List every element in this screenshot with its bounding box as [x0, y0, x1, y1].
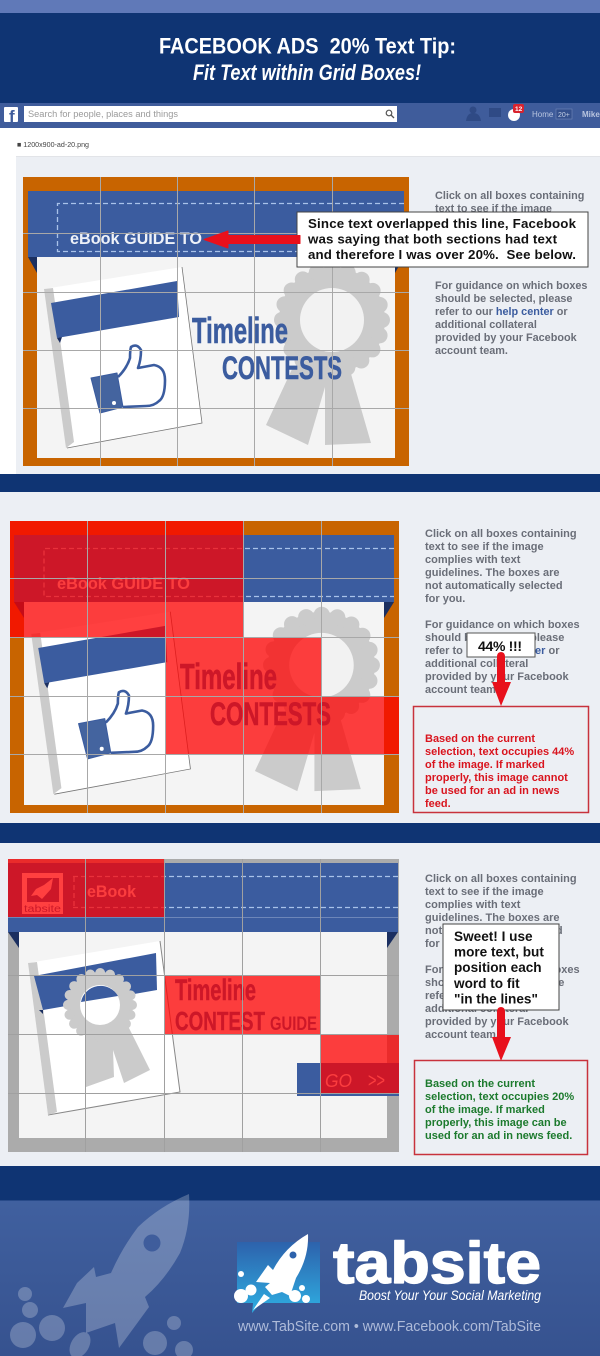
instructions text: account team. [425, 1029, 499, 1041]
tabsite wordmark: tabsite [333, 1231, 541, 1296]
result box: pass: of the image. If marked [425, 1104, 545, 1116]
calendar card with thumb [31, 612, 190, 794]
callout: overlap explanation: and therefore I was over 20%. See below. [308, 247, 576, 262]
result box: fail [414, 706, 588, 812]
result box: fail: Based on the current [425, 733, 535, 745]
ad text: eBook guide: eBook GUIDE TO [70, 229, 202, 248]
facebook top bar: 20+ [558, 112, 570, 119]
instructions text: For guidance on which boxes [425, 619, 580, 631]
callout: sweet: "in the lines" [454, 992, 538, 1006]
ad text: timeline: Timeline [180, 656, 277, 697]
instructions text: account team. [435, 345, 508, 357]
instructions text [425, 873, 580, 1041]
card with ribbon [28, 941, 180, 1115]
facebook top bar: Search for people, places and things [28, 109, 178, 119]
ribbon badge [255, 612, 375, 791]
result box: pass: selection, text occupies 20% [425, 1091, 574, 1103]
callout: 44% [467, 633, 535, 657]
rocket window [144, 1234, 160, 1252]
selected grid cells [10, 521, 399, 754]
GO button: GO [325, 1071, 352, 1091]
result box: fail: feed. [425, 798, 451, 810]
logo square [22, 873, 63, 915]
result box: fail: properly, this image cannot [425, 772, 568, 784]
panel: step 1 [16, 156, 600, 474]
navy divider [0, 823, 600, 843]
callout: sweet: more text, but [454, 944, 544, 960]
callout: 44%: 44% !!! [478, 638, 522, 654]
callout: sweet: position each [454, 960, 542, 975]
ad text: contest guide: CONTEST [175, 1006, 265, 1036]
callout: sweet: word to fit [453, 976, 520, 991]
navy divider [0, 1166, 600, 1201]
instructions text: For guidance on which boxes [435, 280, 587, 292]
result box: fail: be used for an ad in news [425, 785, 559, 797]
instructions text: should be selected, please [425, 977, 564, 989]
result box: pass: Based on the current [425, 1078, 535, 1090]
facebook top bar [0, 103, 600, 128]
instructions text: additional collateral [425, 1003, 528, 1015]
footer [0, 1194, 600, 1356]
instructions text: additional collateral [425, 658, 528, 670]
ad image: marked at 20% [8, 859, 399, 1152]
instructions text: should be selected, please [425, 632, 564, 644]
instructions text: guidelines. The boxes are [425, 567, 560, 579]
instructions text: For guidance on which boxes [425, 964, 580, 976]
instructions text: refer to our help center or [425, 990, 560, 1002]
ribbon badge [266, 267, 385, 445]
result box: fail: selection, text occupies 44% [425, 746, 574, 758]
instructions text: not automatically selected [425, 925, 563, 937]
instructions text [435, 190, 587, 357]
instructions text: refer to our help center or [425, 645, 560, 657]
instructions text: text to see if the image [425, 541, 544, 553]
title banner: FACEBOOK ADS 20% Text Tip: [159, 34, 456, 58]
ad image: marked at 44% [10, 521, 399, 813]
instructions text: provided by your Facebook [435, 332, 578, 344]
instructions text: refer to our help center or [435, 306, 568, 318]
instructions text: should be selected, please [435, 293, 572, 305]
title banner [0, 13, 600, 103]
instructions text: complies with text [425, 554, 521, 566]
background rocket [10, 1194, 193, 1356]
instructions text: provided by your Facebook [425, 1016, 570, 1028]
result box: pass: properly, this image can be [425, 1117, 567, 1129]
result box: pass [414, 1060, 588, 1154]
panel: step 3 [0, 843, 600, 1166]
instructions text: for you. [425, 938, 465, 950]
tabsite logo icon [234, 1234, 320, 1313]
ad text: guide: GUIDE [270, 1014, 317, 1035]
file name: ■ 1200x900-ad-20.png [17, 140, 89, 149]
ad image: first layout [23, 177, 409, 466]
facebook top bar: Mike [582, 110, 600, 119]
instructions text: not automatically selected [425, 580, 563, 592]
ad text: contests: CONTESTS [222, 350, 342, 386]
arrow: to result [492, 652, 511, 706]
instructions text [425, 528, 580, 696]
instructions text: provided by your Facebook [425, 671, 570, 683]
facebook top bar: Home [532, 110, 554, 119]
GO button [297, 1063, 399, 1096]
instructions text: account team. [425, 684, 499, 696]
result box: pass: used for an ad in news feed. [425, 1130, 572, 1142]
callout: sweet: Sweet! I use [454, 929, 533, 944]
logo square: tabsite [24, 904, 62, 915]
instructions text: Click on all boxes containing [425, 873, 577, 885]
instructions text: Click on all boxes containing [425, 528, 577, 540]
callout: overlap explanation: Since text overlapped this line, Facebook [308, 216, 577, 231]
arrow: to text [204, 231, 300, 248]
callout: sweet [443, 924, 559, 1010]
top accent band [0, 0, 600, 13]
instructions text: additional collateral [435, 319, 537, 331]
instructions text: for you. [425, 593, 465, 605]
tagline: Boost Your Your Social Marketing [359, 1287, 541, 1303]
panel: step 2 [0, 492, 600, 823]
facebook top bar: f [9, 107, 15, 126]
facebook top bar: 12 [515, 106, 523, 113]
website links: www.TabSite.com • www.Facebook.com/TabSite [237, 1318, 541, 1335]
callout: overlap explanation [297, 212, 588, 267]
ad text: contests: CONTESTS [210, 696, 331, 732]
ad text: eBook guide: eBook GUIDE TO [57, 574, 190, 593]
ad text: eBook: eBook [87, 882, 137, 901]
instructions text: text to see if the image [435, 203, 552, 215]
GO button: >> [368, 1070, 385, 1092]
navy divider [0, 474, 600, 492]
selected grid cells [8, 859, 399, 1093]
instructions text: complies with text [425, 899, 521, 911]
ad text: timeline: Timeline [175, 974, 256, 1007]
instructions text: guidelines. The boxes are [425, 912, 560, 924]
callout: overlap explanation: was saying that both sections had text [307, 232, 558, 246]
result box: fail: of the image. If marked [425, 759, 545, 771]
arrow: to result [492, 1007, 511, 1061]
instructions text: Click on all boxes containing [435, 190, 584, 202]
title banner: Fit Text within Grid Boxes! [193, 60, 421, 85]
calendar card with thumb [44, 267, 202, 448]
instructions text: text to see if the image [425, 886, 544, 898]
ad text: timeline: Timeline [192, 310, 288, 351]
